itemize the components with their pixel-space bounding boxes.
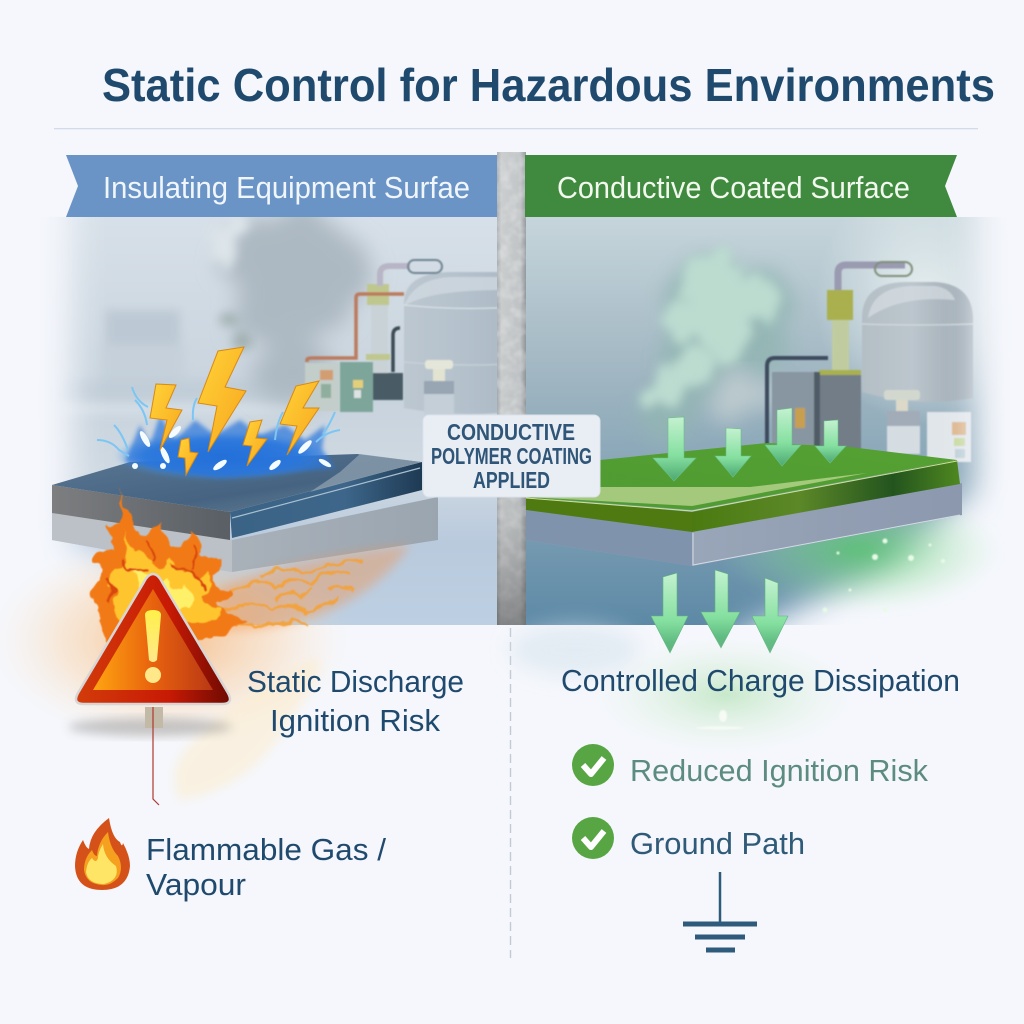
banner: conductive coated surface	[525, 155, 957, 217]
pale flame wisp	[174, 659, 320, 800]
lower grey slab	[526, 483, 962, 566]
pressure tank and equipment right	[767, 262, 973, 462]
label: static discharge ignition risk: Ignition Risk	[270, 703, 440, 738]
scene background right	[526, 217, 1024, 625]
panel: insulating surface scene	[57, 217, 497, 625]
callout: conductive polymer coating applied	[423, 415, 600, 497]
flames	[93, 488, 410, 640]
smoke right	[641, 253, 796, 436]
spark glow	[114, 432, 330, 480]
label: static discharge ignition risk: Static Discharge	[247, 664, 464, 699]
main flame	[93, 488, 250, 640]
label: controlled charge dissipation: Controlled Charge Dissipation	[561, 663, 960, 698]
label: static discharge ignition risk	[247, 664, 464, 738]
smoke left	[205, 206, 373, 408]
soft haze below left of right panel	[510, 624, 640, 676]
label: reduced ignition risk: Reduced Ignition Risk	[630, 753, 928, 788]
icons: lightning bolts	[150, 347, 319, 475]
sparkle particles	[822, 538, 945, 612]
green coating sides	[526, 497, 692, 532]
flame core	[108, 524, 222, 625]
title divider	[54, 128, 978, 129]
icon: ground symbol	[683, 872, 757, 950]
exclamation mark	[145, 610, 161, 662]
light patch upper right	[842, 217, 982, 412]
green top surface	[526, 443, 957, 510]
orange fire glow	[0, 535, 350, 745]
callout: conductive polymer coating applied: POLYMER COATING	[431, 443, 592, 469]
masked scene contents left	[57, 217, 497, 625]
flame veins	[106, 540, 205, 604]
streaming flames haze	[215, 545, 410, 631]
conductive coating platform	[526, 443, 962, 566]
label: flammable gas / vapour: Flammable Gas /	[146, 832, 386, 867]
soft green glow below arrows	[595, 637, 855, 753]
top surface	[52, 454, 421, 512]
label: ground path: Ground Path	[630, 826, 805, 861]
title: Static Control for Hazardous Environments	[102, 59, 995, 111]
sign body	[76, 574, 230, 704]
callout: conductive polymer coating applied: CONDUCTIVE	[447, 419, 575, 445]
label: flammable gas / vapour: Vapour	[146, 867, 246, 902]
streaming flame tongues	[215, 561, 362, 628]
lower dashed divider	[510, 628, 512, 958]
icon: flame	[75, 818, 130, 890]
upper slab sides	[52, 485, 230, 540]
green glow under platform	[720, 488, 1000, 612]
masked scene contents right	[526, 217, 996, 625]
platform: insulating equipment slab	[52, 454, 438, 572]
reflection	[527, 473, 867, 506]
sign post	[145, 707, 163, 728]
icon: warning triangle	[68, 574, 232, 805]
panel: conductive surface scene	[526, 217, 996, 625]
blue electric sparks	[97, 387, 340, 480]
distant blurred plant	[88, 309, 268, 412]
pressure tank and equipment left	[304, 258, 497, 414]
vertical divider pole	[497, 152, 526, 625]
callout: conductive polymer coating applied: APPLIED	[473, 467, 550, 493]
icon: check ground path	[572, 817, 614, 859]
spark spikes	[125, 415, 335, 478]
banner: insulating equipment surface: Insulating Equipment Surfae	[103, 170, 470, 205]
sign shadow	[68, 718, 232, 736]
arrows: charge dissipating to ground	[651, 570, 788, 653]
spark shards	[97, 387, 340, 456]
small light spark below label	[696, 710, 744, 730]
sign inner	[93, 589, 213, 690]
icon: check reduced ignition risk	[572, 744, 614, 786]
lower slab	[52, 497, 438, 572]
flame highlights	[130, 565, 193, 610]
arrows: charge into coating	[653, 408, 846, 481]
banner: conductive coated surface: Conductive Coated Surface	[557, 170, 910, 205]
scene background left	[20, 217, 498, 625]
label: flammable gas / vapour	[146, 832, 386, 902]
banner: insulating equipment surface	[66, 155, 497, 217]
red line	[153, 707, 159, 805]
